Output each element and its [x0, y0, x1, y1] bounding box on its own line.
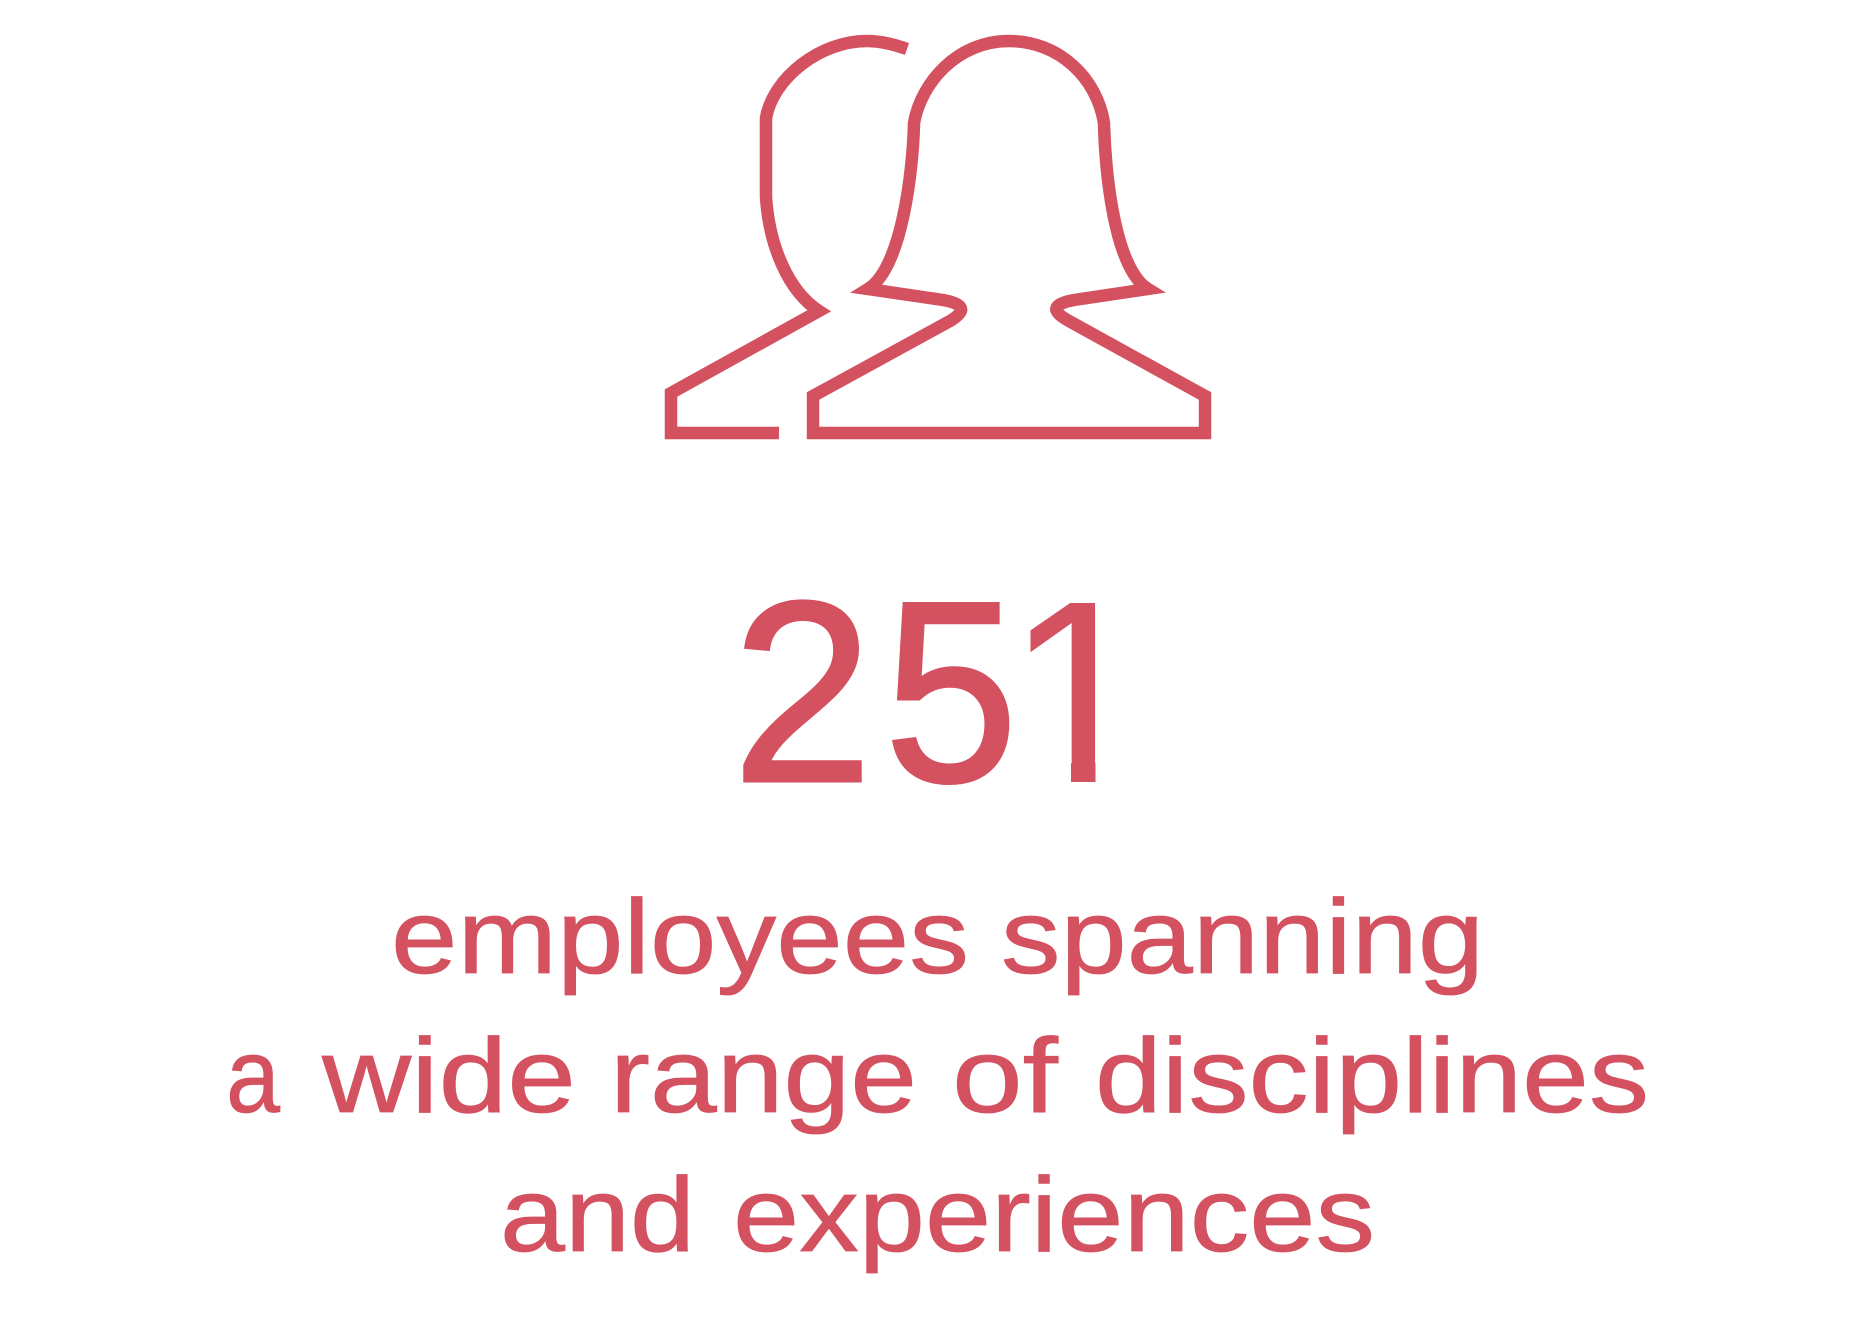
big number 251: 1 — [1005, 544, 1152, 840]
description text — [226, 878, 1649, 1274]
line 2: a wide range of disciplines: range — [610, 1017, 917, 1135]
line 2: a wide range of disciplines: of — [952, 1017, 1059, 1135]
icon: back person outline — [671, 41, 907, 433]
line 3: and experiences — [500, 1156, 1375, 1274]
big number 251: 2 — [732, 547, 873, 836]
big number 251 — [743, 599, 1096, 785]
icon: front person outline — [813, 41, 1205, 433]
infographic panel — [230, 34, 1646, 1274]
line 2: a wide range of disciplines: a — [226, 1017, 280, 1135]
line 1: employees spanning: employees — [391, 878, 969, 996]
line 1: employees spanning: spanning — [1001, 878, 1484, 996]
line 1: employees spanning — [391, 878, 1484, 996]
line 3: and experiences: and — [500, 1156, 695, 1274]
line 2: a wide range of disciplines: wide — [321, 1017, 576, 1135]
line 3: and experiences: experiences — [733, 1156, 1375, 1274]
big number 251: 5 — [884, 547, 1018, 836]
icon: two people outlines — [671, 41, 1205, 433]
line 2: a wide range of disciplines: disciplines — [1095, 1017, 1649, 1135]
line 2: a wide range of disciplines — [226, 1017, 1649, 1135]
